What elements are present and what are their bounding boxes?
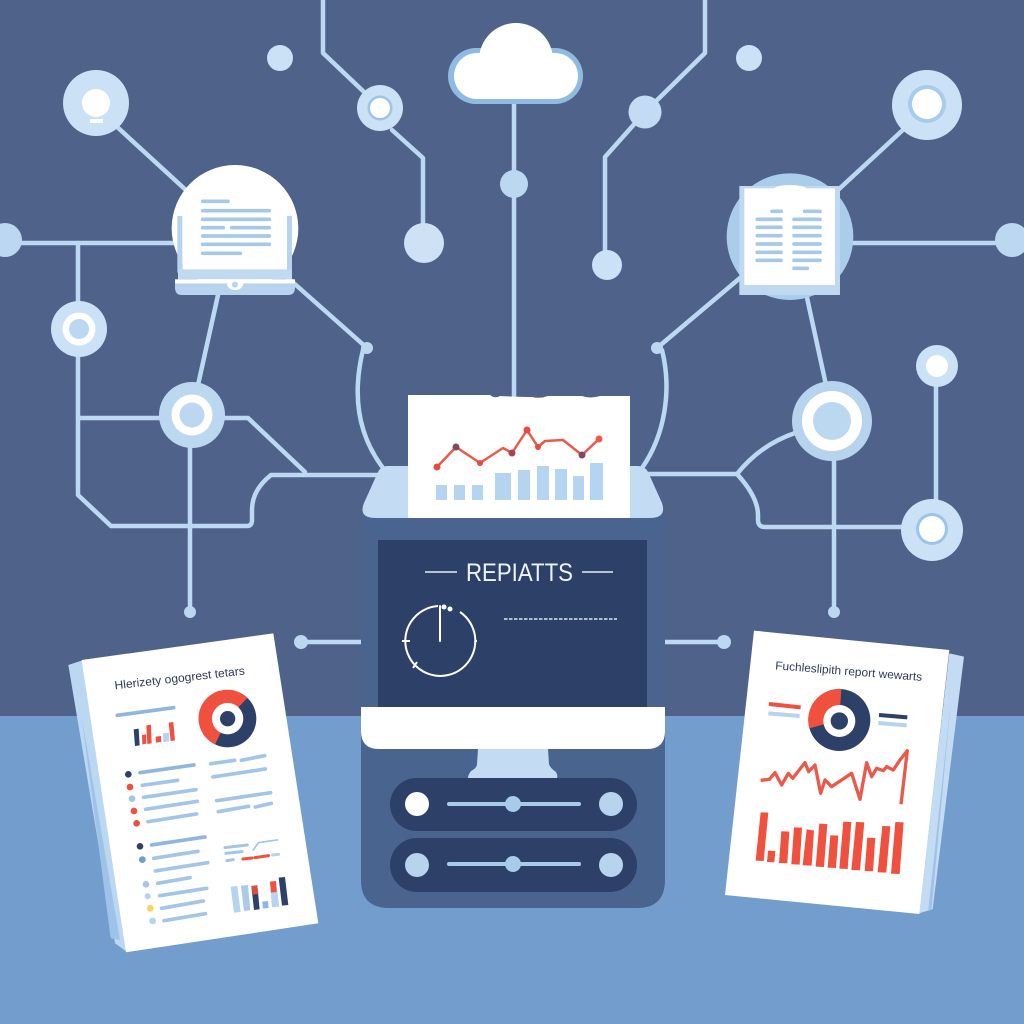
node: far left [0, 223, 22, 257]
node: left ring [51, 301, 107, 357]
page title: Fuchleslipith report wewarts [775, 659, 923, 684]
hopper [362, 466, 663, 518]
lower bar chart [231, 877, 288, 913]
node: top right ring [892, 70, 962, 140]
icon: clock dial [402, 606, 477, 676]
node: left large ring [159, 382, 225, 448]
line chart [437, 430, 599, 467]
red line chart [761, 751, 907, 804]
legend bars [768, 704, 907, 725]
network connector lines [0, 0, 1020, 642]
dashed rule [504, 618, 617, 620]
mini timeline [225, 840, 279, 861]
node: small top left [267, 45, 293, 71]
central device [361, 395, 665, 908]
small terminal nodes [184, 342, 840, 649]
monitor stand [468, 749, 557, 778]
control pill 1 [390, 778, 637, 831]
donut chart [808, 689, 870, 751]
screen title: REPIATTS [466, 559, 573, 587]
page title: Hlerizety ogogrest tetars [114, 665, 246, 692]
left report page [68, 633, 318, 952]
device body [361, 515, 665, 908]
bar chart [436, 463, 603, 500]
report sheet in slot [408, 395, 630, 518]
node: centre left drop [404, 223, 444, 263]
monitor base bar [361, 707, 665, 749]
node: cloud stem [500, 170, 528, 198]
node: right lower ring [901, 499, 963, 561]
icon: cloud [448, 23, 583, 104]
icon: laptop document [172, 165, 298, 295]
node: far right [995, 223, 1024, 257]
text lines [757, 211, 820, 268]
front sheet [725, 631, 949, 914]
background wall [0, 0, 1024, 716]
front sheet [82, 633, 318, 952]
control pill 2 [390, 838, 637, 892]
donut chart [198, 690, 256, 747]
node: ring top centre left [357, 85, 403, 131]
back sheets [68, 660, 127, 952]
screen [378, 540, 647, 708]
right report page [725, 631, 964, 914]
text lines [203, 201, 269, 253]
node: upper right junction [628, 96, 662, 128]
node: centre right drop [592, 250, 622, 280]
list bullets [125, 771, 156, 924]
text lines [117, 708, 271, 921]
mini bar chart [134, 722, 175, 746]
node: right large ring [792, 381, 872, 461]
node: small top right [736, 45, 762, 71]
back sheets [919, 653, 964, 913]
node: top left lamp [63, 70, 129, 136]
red bar chart [756, 812, 904, 874]
icon: open document [727, 173, 853, 300]
node: right upper small ring [916, 345, 958, 387]
floor [0, 716, 1024, 1024]
